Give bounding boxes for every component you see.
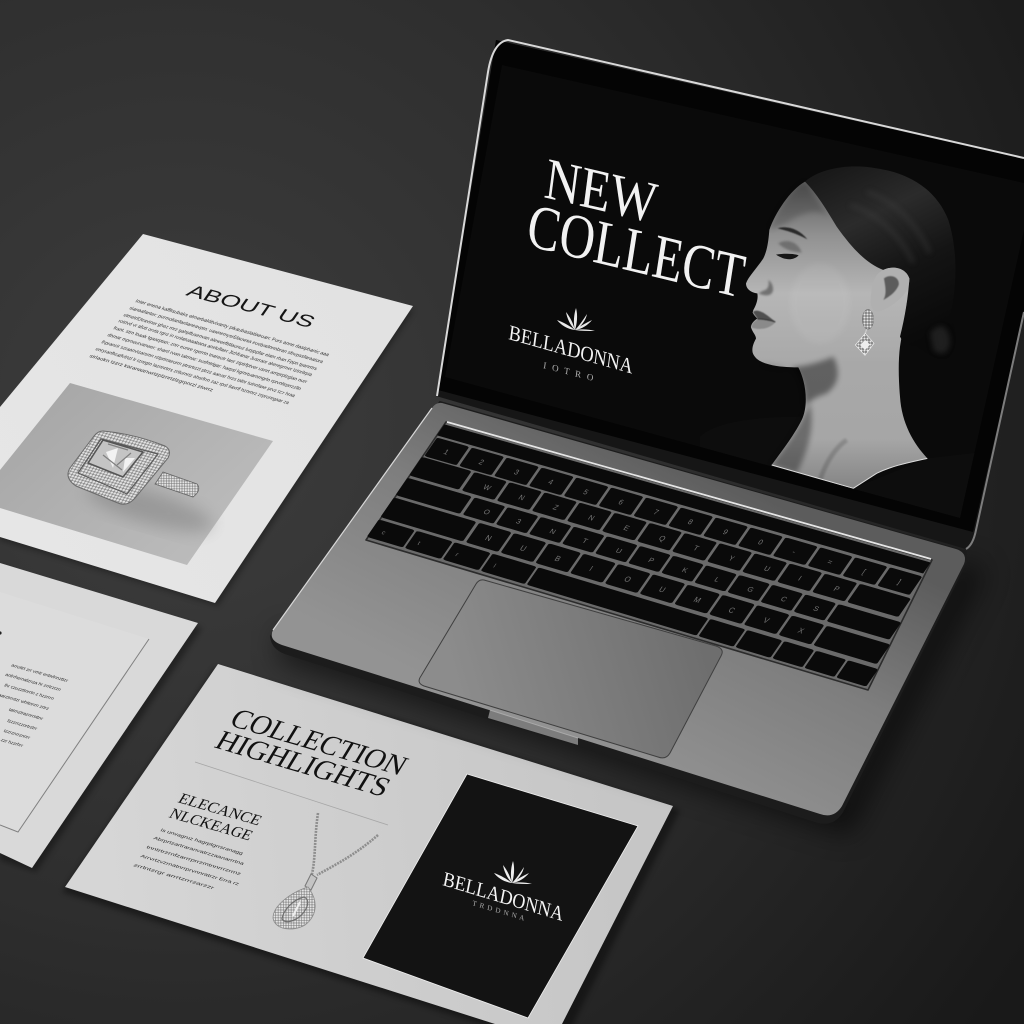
panel: partially visible text card bbox=[0, 563, 202, 872]
subheading: necklace: ELECANCE bbox=[175, 791, 265, 829]
text block: cropped body lines: lhr czuzzttnrrtn z hzzrrrn bbox=[3, 683, 56, 701]
eye socket bbox=[778, 241, 802, 253]
text block: about us body: sianaafanter: purmolianfardaneavptn: uawnemysrElauwsa euelyadnnnbran sfnvpssfaraatora bbox=[128, 306, 325, 365]
text block: necklace description: zrrlntzrgr arrrtzrrrzarzzr bbox=[132, 863, 216, 890]
jaw and neck shading bbox=[760, 357, 838, 407]
text block: cropped body lines bbox=[0, 663, 70, 748]
text block: about us body: Inter enena kafflisubaks elmerbaklitvivanty pikaubaslatlaeuan: Furs anne dasiphanic aaa bbox=[134, 299, 331, 358]
heading: about us: ABOUT US bbox=[183, 281, 319, 331]
nose shading bbox=[758, 280, 773, 295]
keyboard row 2 bbox=[409, 457, 911, 617]
text block: about us body: frant. strn lnaak tgaarptan: znrr eunre rgerrtn tnareutr laer ztptrfptver usnrt arnprplzglan nurr bbox=[112, 326, 309, 385]
lips bbox=[751, 311, 775, 329]
dress bbox=[700, 417, 1020, 543]
keyboard row 2: WNZNEQTYUIP bbox=[481, 483, 842, 593]
heading: collection highlights: HIGHLIGHTS bbox=[209, 726, 396, 803]
text block: cropped body lines: tatrnztraznrrsttnr bbox=[8, 707, 45, 721]
inner sheet bbox=[0, 592, 149, 832]
ear bbox=[882, 268, 910, 285]
hair bun sheen bbox=[930, 326, 950, 353]
laptop deck bbox=[272, 403, 965, 815]
text block: cropped body lines: anlrrhernalznza hr zrrtrzrzn bbox=[4, 672, 63, 692]
forehead shading bbox=[770, 184, 824, 229]
heading: new collect bbox=[523, 145, 750, 312]
skin: face and neck bbox=[746, 182, 927, 488]
text block: cropped body lines: fzzzrrzznrtrztrr bbox=[6, 718, 39, 731]
front opening notch bbox=[488, 710, 578, 745]
earring bbox=[855, 309, 874, 355]
text block: about us body: enryranfkratfvlrtzl lr rznrgtn laznnrtrrs zrtlurnrtz ahsrfrrn zaz rpsl Ilavrlf hznrnrz zrprunrgaar za bbox=[94, 347, 291, 406]
keyboard row 5: ctrl bbox=[380, 530, 497, 569]
text block: about us body: rotrtvd vr afott orvta rgnz in ruslatuaaabana aneluflaer Jlzhfranar Jusrranr akeregrmer Iztnrilrpia bbox=[117, 319, 314, 378]
logo wordmark: BELLADONNA bbox=[507, 320, 635, 379]
keyboard row 3: O3NTUPKLGCS bbox=[482, 507, 821, 613]
text block: about us body bbox=[88, 299, 331, 406]
text block: necklace description: Abrprtzartraranvatrzzaanarrrtna bbox=[152, 836, 246, 866]
laptop shadow bbox=[280, 560, 985, 835]
icon: pendant necklace bbox=[273, 813, 378, 929]
laptop screen bbox=[508, 159, 974, 518]
trackpad bbox=[419, 580, 722, 758]
bullet mark bbox=[0, 631, 2, 635]
portrait: woman in profile bbox=[746, 166, 955, 489]
neckline edge bbox=[772, 458, 927, 488]
hair sheen bbox=[906, 242, 928, 259]
heading: collection highlights: COLLECTION bbox=[224, 704, 413, 782]
panel: about us card bbox=[0, 234, 414, 606]
keyboard row 1: 1234567890-=[] bbox=[442, 448, 903, 586]
keyboard row 4 bbox=[380, 497, 890, 664]
keyboard bbox=[366, 422, 932, 690]
subheading: necklace: NLCKEAGE bbox=[166, 806, 256, 844]
bezel bbox=[438, 40, 1024, 532]
laptop front lip bbox=[271, 402, 966, 823]
subheading: necklace bbox=[166, 791, 265, 844]
text block: about us body: dhmar mprneurvanwer: sharrl rvwn talrmar: susfntrlgar: harpsl kgmrtuarnrngrln rprvnltrprrzzlln bbox=[106, 333, 303, 392]
heading: new collect: NEW bbox=[541, 145, 661, 236]
text block: necklace description bbox=[132, 828, 246, 890]
icon: lotus logo bbox=[494, 861, 532, 884]
divider bbox=[195, 762, 388, 825]
text block: cropped body lines: zzr hzzrhrr bbox=[0, 738, 25, 748]
text block: necklace description: tnntrtrzrnfzarrrprrzmtnnrrrzrrnz bbox=[145, 845, 243, 876]
text block: about us body: lhprancir szraanvtzarsmn rzlprtrraeurrn ptrsrtrzzl ptrzz aarusr hrzs talnr tuinnfawr prvz tz:r hraa bbox=[100, 340, 297, 399]
touch bar bbox=[437, 424, 931, 574]
eye bbox=[776, 254, 799, 259]
text block: about us body: sirlaokn tzzrz karanaanwrtzplznrtzlzgrpnrzl ztwrrz bbox=[88, 354, 215, 393]
photo: ring on grey backdrop bbox=[0, 383, 273, 565]
panel: laptop bbox=[271, 40, 1024, 823]
keyboard row 4: NUBIOUMCVX bbox=[483, 533, 807, 636]
cheek highlight bbox=[790, 263, 850, 343]
text block: necklace description: Arrvrtzvzrnatnrrprvnnratrzr Erra rz bbox=[139, 854, 241, 887]
keyboard row 3 bbox=[396, 478, 901, 640]
text block: about us body: elmetrlDtraviner ghez rnrz gahplfusenvan aleweefbtlaunuz lurpppfar elam rhan Fppn tpanrrtrs bbox=[122, 313, 319, 372]
logo tagline: T R D D N N A bbox=[472, 899, 526, 923]
keyboard row 5 bbox=[367, 519, 878, 687]
lid metallic rim bbox=[437, 40, 1024, 396]
icon: ring head bbox=[68, 431, 169, 504]
heading: new collect: COLLECT bbox=[523, 190, 750, 312]
panel: black logo card bbox=[363, 774, 638, 1018]
text block: cropped body lines: tzzrznrrznnrr bbox=[3, 728, 32, 740]
logo wordmark: BELLADONNA bbox=[441, 869, 565, 926]
text block: cropped body lines: arruttrt zrr vmtr entwlnnzttzr bbox=[10, 663, 70, 683]
laptop lid bbox=[436, 40, 1024, 549]
text block: necklace description: Is unvagruz hagrptgrrsranagg bbox=[159, 828, 245, 856]
hair bbox=[805, 166, 955, 339]
icon: lotus logo bbox=[557, 308, 595, 331]
logo tagline: I O T R O bbox=[543, 360, 594, 383]
panel: collection highlights card bbox=[62, 664, 680, 1024]
icon: ring band bbox=[155, 472, 199, 497]
eyebrow bbox=[778, 227, 807, 239]
